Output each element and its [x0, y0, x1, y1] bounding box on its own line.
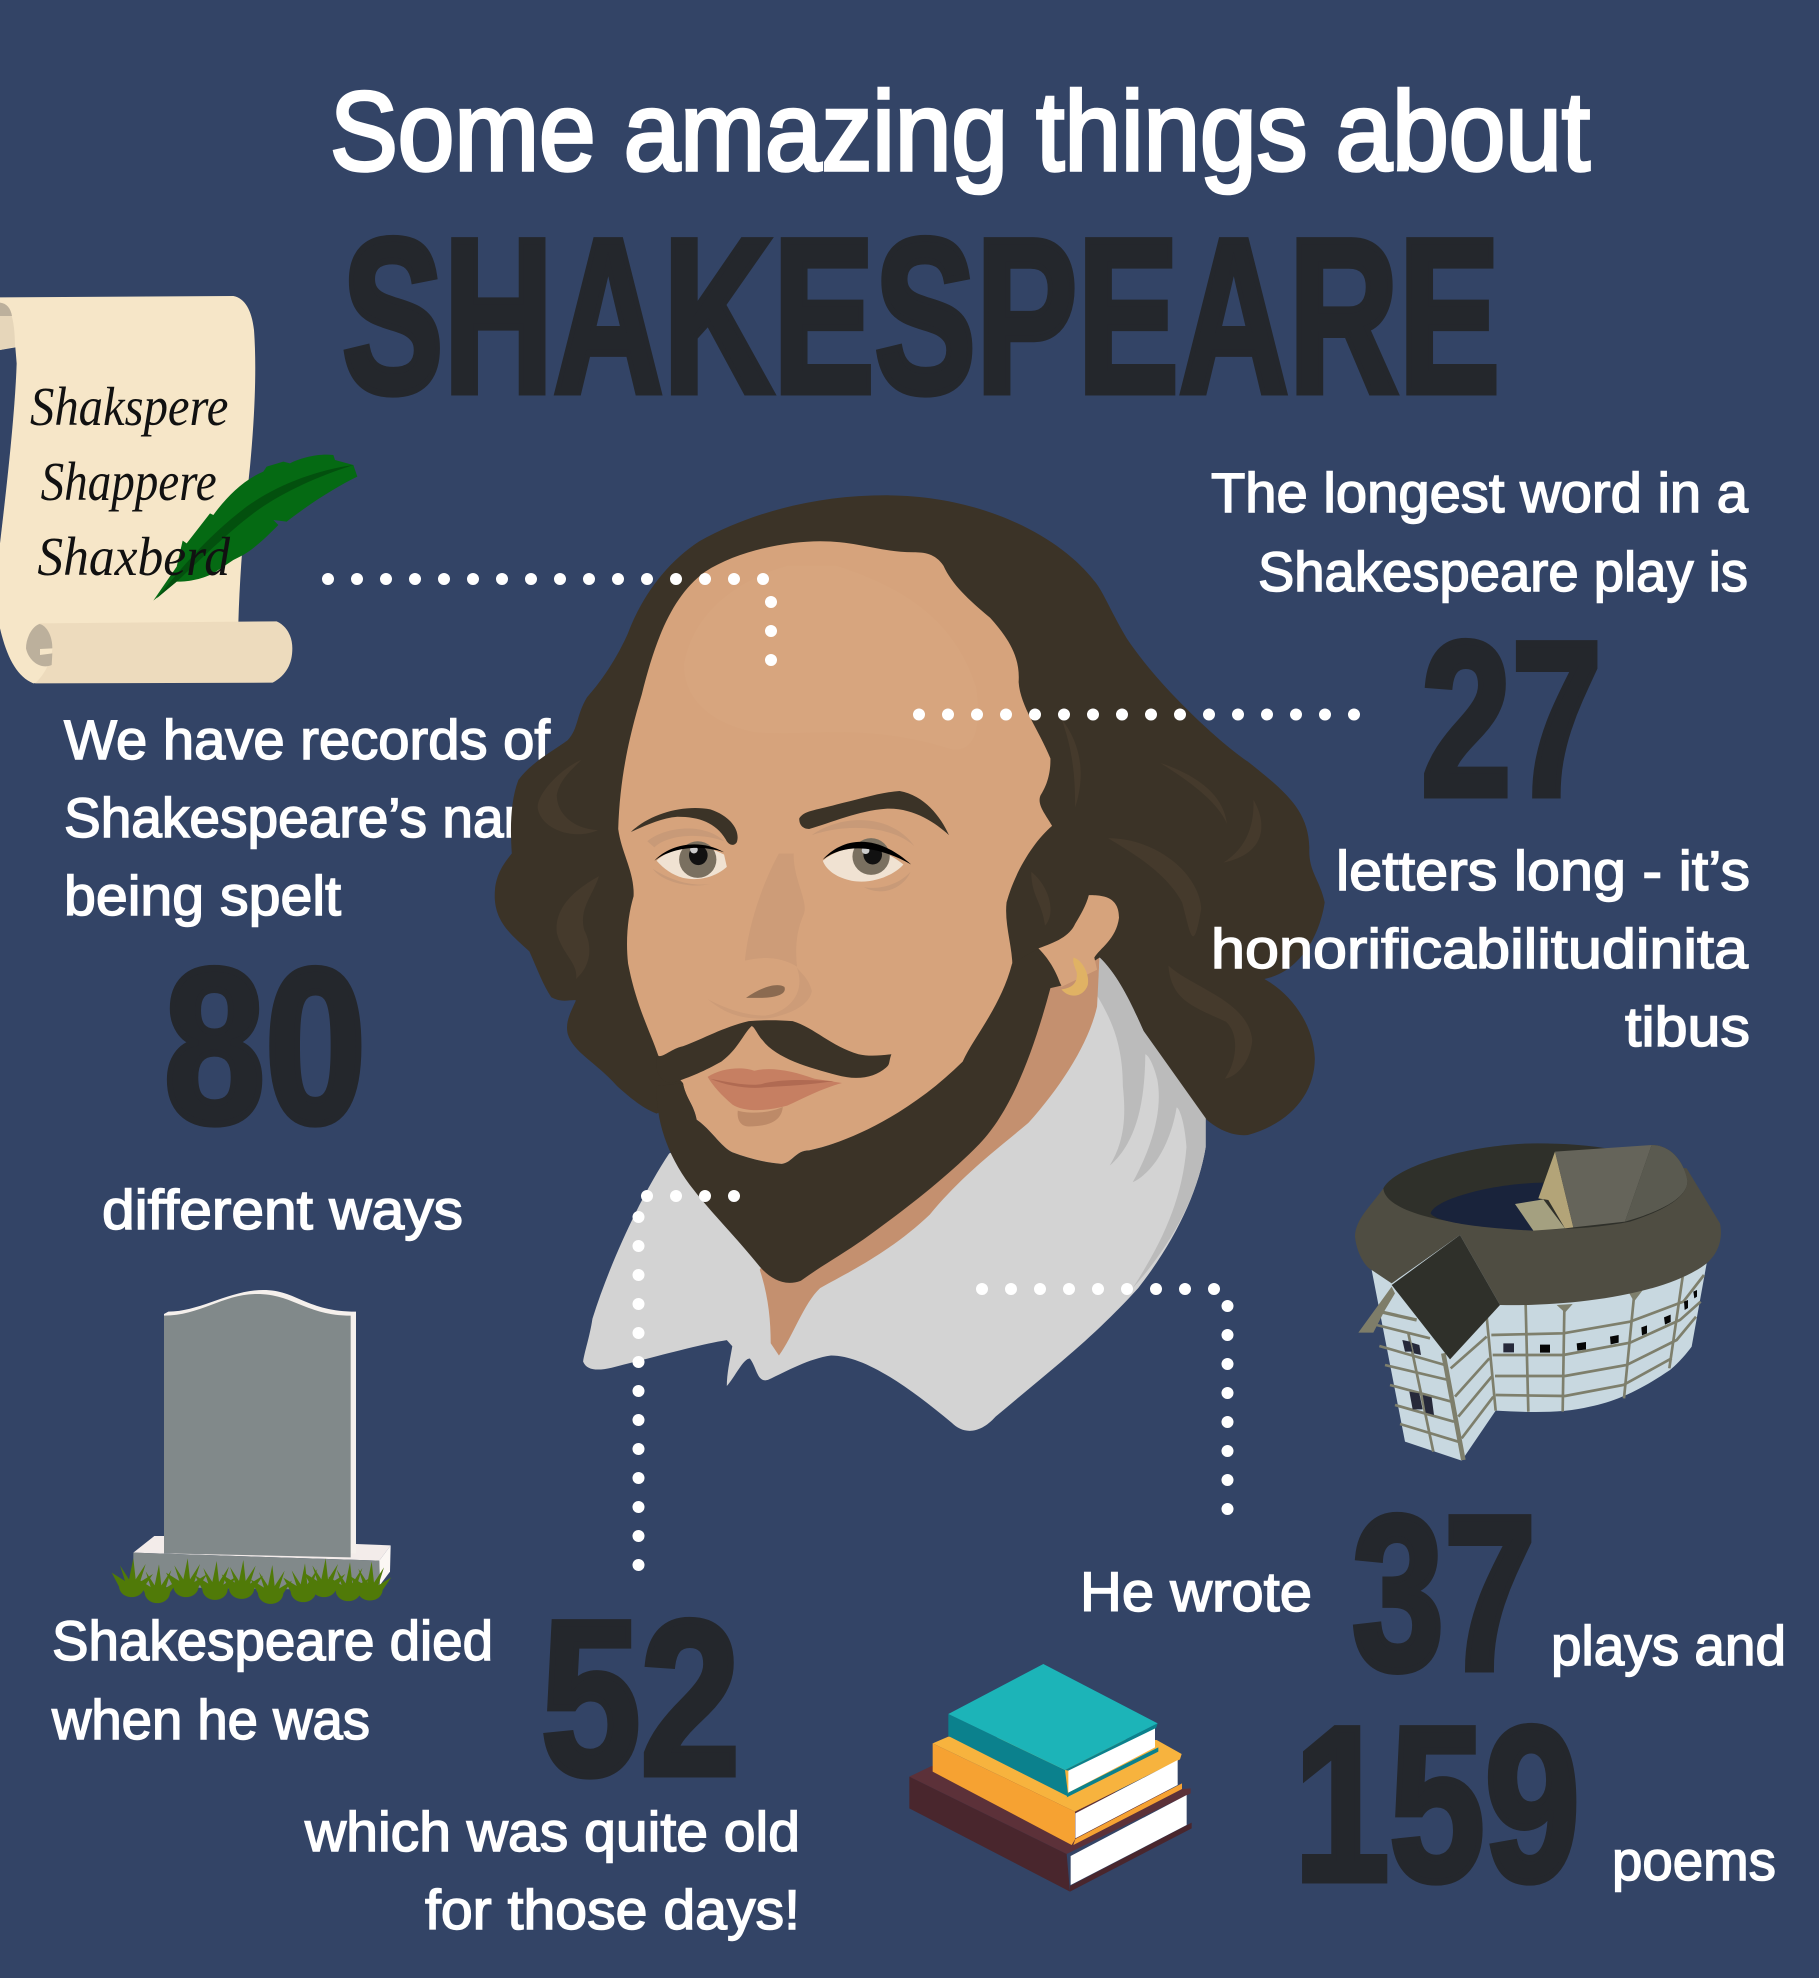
- dotted connector: age: [638, 1196, 734, 1570]
- panel: longest word text: [1211, 461, 1750, 1058]
- title: [330, 69, 1590, 439]
- spelling: Shappere: Shappere: [41, 451, 217, 512]
- collar shadow: [1097, 958, 1206, 1288]
- base end: [379, 1545, 391, 1585]
- hair: [495, 495, 1325, 1135]
- porch roof: [1392, 1235, 1500, 1359]
- timber brackets: [1557, 1289, 1643, 1313]
- panel: gravestone: [112, 1290, 391, 1604]
- base front: [133, 1553, 380, 1590]
- text: died: Shakespeare died: [52, 1609, 493, 1672]
- icon: scroll and quill: [0, 296, 357, 683]
- moustache: [657, 1020, 891, 1083]
- text: different ways: different ways: [102, 1178, 463, 1241]
- number 159: 159: [1294, 1681, 1580, 1927]
- text: plays and: plays and: [1551, 1614, 1786, 1677]
- timbers: [1377, 1275, 1704, 1460]
- text: when: when he was: [51, 1688, 370, 1751]
- number 37: 37: [1352, 1470, 1536, 1716]
- nostril: [746, 985, 785, 998]
- number 80: 80: [164, 923, 366, 1169]
- spelling: Shaxberd: Shaxberd: [37, 526, 230, 587]
- collar: [583, 958, 1206, 1431]
- text: those days: for those days!: [425, 1878, 800, 1941]
- windows: [1402, 1290, 1697, 1415]
- roll end: [26, 624, 52, 666]
- stone face: [164, 1294, 351, 1557]
- icon: Globe Theatre: [1355, 1143, 1721, 1461]
- top curl: [0, 303, 15, 350]
- top curl shadow: [0, 303, 12, 316]
- text: play: Shakespeare play is: [1258, 540, 1748, 603]
- text: name: Shakespeare’s name: [64, 786, 580, 849]
- panel: age text: [51, 1575, 800, 1941]
- dotted connector: word: [919, 708, 1360, 720]
- text: long word: honorificabilitudinita: [1211, 917, 1749, 980]
- stone back: [164, 1290, 356, 1553]
- top book: [948, 1664, 1158, 1797]
- stage house: [1515, 1145, 1687, 1231]
- text: spelt: being spelt: [64, 864, 341, 927]
- text: letters long: letters long - it’s: [1336, 839, 1750, 902]
- text: longest word: The longest word in a: [1211, 461, 1749, 524]
- nose shading: [708, 853, 812, 1019]
- text: tibus: tibus: [1625, 995, 1750, 1058]
- middle book: [933, 1737, 1182, 1845]
- grass: [112, 1558, 391, 1604]
- ear: [1038, 895, 1119, 987]
- title line: Some amazing things about: [330, 69, 1590, 194]
- theatre yard: [1431, 1183, 1543, 1231]
- face: [618, 541, 1052, 1164]
- base: [133, 1536, 391, 1561]
- spelling: Shakspere: Shakspere: [30, 376, 228, 437]
- text: quite old: which was quite old: [304, 1800, 800, 1863]
- panel: plays and poems text: [1080, 1470, 1786, 1927]
- icon: stack of books: [909, 1664, 1192, 1892]
- gap behind the paper edge: [0, 347, 17, 543]
- thatched roof: [1355, 1147, 1721, 1305]
- beard: [657, 948, 1061, 1283]
- lips: [708, 1068, 842, 1126]
- earring: [1061, 958, 1088, 996]
- dotted connector: name: [328, 579, 771, 665]
- roof inner: [1383, 1143, 1687, 1229]
- bottom roll: [35, 621, 292, 683]
- hair strands: [538, 719, 1261, 1079]
- left eye: [647, 829, 727, 886]
- bottom book: [909, 1766, 1192, 1892]
- text: records: We have records of: [64, 708, 550, 771]
- left eyebrow: [631, 808, 738, 845]
- gable: [1358, 1287, 1395, 1333]
- walls: [1372, 1233, 1707, 1461]
- feather: [153, 455, 357, 601]
- scroll paper: [0, 296, 277, 683]
- number 27: 27: [1421, 596, 1602, 842]
- right eye: [812, 820, 914, 891]
- forehead highlight: [684, 566, 978, 750]
- panel: name spellings text: [64, 708, 580, 1241]
- text: poems: poems: [1612, 1829, 1776, 1892]
- text: he wrote: He wrote: [1080, 1560, 1312, 1623]
- portrait of Shakespeare: [495, 495, 1325, 1431]
- dotted connector: plays: [982, 1289, 1228, 1512]
- neck: [760, 951, 1100, 1355]
- number 52: 52: [541, 1575, 740, 1821]
- right eyebrow: [799, 791, 949, 835]
